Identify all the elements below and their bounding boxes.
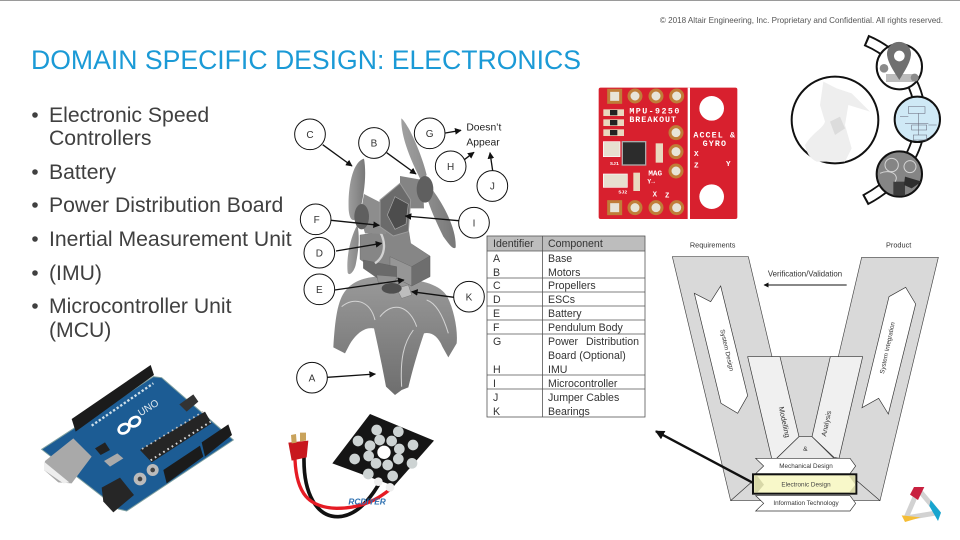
silkscreen labels: MAG <box>648 170 663 178</box>
silkscreen labels: Z <box>694 162 699 170</box>
robot exploded view diagram <box>295 118 508 395</box>
callout arrows <box>323 130 493 377</box>
does not appear note: Doesn’t <box>466 123 501 134</box>
base highlights <box>342 300 448 387</box>
callout letters: B <box>371 139 378 150</box>
callout letters: F <box>314 215 320 226</box>
Arduino logo <box>117 415 142 435</box>
component table: Power <box>548 336 578 348</box>
large robot circle <box>792 77 878 163</box>
component table: H <box>493 364 501 376</box>
UNO label: UNO <box>136 398 161 419</box>
Arduino Uno photo <box>42 365 233 512</box>
bullet list: (IMU) <box>49 262 102 285</box>
T connector <box>288 441 308 461</box>
bullet list: Power Distribution Board <box>49 194 283 217</box>
information technology chevron <box>756 496 856 511</box>
watermark: RCDIYER <box>348 497 386 507</box>
callout letters <box>306 129 495 384</box>
robot base <box>333 276 457 395</box>
component table: I <box>493 378 496 390</box>
wires <box>295 457 390 517</box>
system integration arrow <box>862 287 916 414</box>
silkscreen labels: BREAKOUT <box>629 115 676 125</box>
small resistors <box>603 109 663 191</box>
V labels: Verification/Validation <box>768 269 842 278</box>
mechanical design chevron: Mechanical Design <box>779 463 833 470</box>
component table: A <box>493 253 501 265</box>
silkscreen labels: SJ1 <box>610 161 619 167</box>
silkscreen labels: Z <box>665 192 670 200</box>
information technology chevron: Information Technology <box>773 500 839 507</box>
curved ESC strap <box>375 232 384 263</box>
callout letters: I <box>473 218 475 229</box>
silkscreen labels: ACCEL & <box>693 130 735 140</box>
component table: Propellers <box>548 280 596 292</box>
barrel jack <box>102 478 134 512</box>
silkscreen labels: Y→ <box>647 178 655 185</box>
component table: D <box>493 294 501 306</box>
component table: K <box>493 406 500 418</box>
callout letters: G <box>426 129 434 140</box>
bullet list: Inertial Measurement Unit <box>49 228 292 251</box>
copyright notice: © 2018 Altair Engineering, Inc. Proprietary and Confidential. All rights reserved. <box>660 16 943 25</box>
analysis panel <box>812 357 863 458</box>
does not appear note <box>466 123 501 148</box>
system design arrow: System Design <box>718 329 735 372</box>
silkscreen labels: SJ2 <box>618 189 627 195</box>
silkscreen labels <box>610 106 735 200</box>
solder pads <box>609 90 683 214</box>
V labels <box>690 240 911 278</box>
does not appear note: Appear <box>466 137 500 148</box>
location pin circle <box>877 44 922 89</box>
electronic design chevron highlighted <box>753 474 856 494</box>
V labels: Product <box>886 240 911 249</box>
callout letters: J <box>490 182 495 193</box>
callout circles <box>295 118 508 393</box>
Altair logo <box>902 487 941 522</box>
ampersand trapezoid: & <box>803 446 808 453</box>
ICSP pins <box>179 394 198 412</box>
bullet list: Microcontroller Unit <box>49 295 232 318</box>
system integration arrow: System Integration <box>879 321 897 375</box>
right propeller <box>401 118 456 248</box>
title: DOMAIN SPECIFIC DESIGN: ELECTRONICS <box>31 45 581 75</box>
bullet list: Electronic Speed <box>49 104 209 127</box>
callout letters: A <box>309 373 316 384</box>
component table: Microcontroller <box>548 378 618 390</box>
modelling panel: Modelling <box>777 406 792 438</box>
capacitors <box>134 473 146 485</box>
silkscreen labels: X <box>694 151 699 159</box>
microcontroller chip <box>140 412 212 462</box>
V labels: Requirements <box>690 240 736 249</box>
solder pads <box>349 425 418 492</box>
power distribution board photo <box>288 414 434 517</box>
component table: E <box>493 308 500 320</box>
corner lines <box>731 480 880 501</box>
callout letters: D <box>316 248 323 259</box>
silver USB port <box>44 438 92 483</box>
silkscreen labels: Y <box>726 161 731 169</box>
battery and body blocks <box>360 228 430 298</box>
mechanical photo circle <box>877 151 922 197</box>
verification arrow <box>764 283 847 286</box>
callout letters: H <box>447 162 454 173</box>
silkscreen labels: X <box>653 192 658 200</box>
left propeller <box>347 159 365 274</box>
component table: ESCs <box>548 294 575 306</box>
component table: Pendulum Body <box>548 322 623 334</box>
component table: G <box>493 336 501 348</box>
component table: Distribution <box>586 336 639 348</box>
component table: Component <box>548 238 603 250</box>
component table: F <box>493 322 500 334</box>
centre hole <box>377 446 391 459</box>
black board <box>332 414 434 486</box>
callout letters: E <box>316 285 323 296</box>
red circuit board <box>599 88 737 219</box>
chip pins <box>151 422 211 460</box>
hexagon plate <box>380 183 411 236</box>
component table: B <box>493 267 500 279</box>
component table: Base <box>548 253 572 265</box>
ampersand trapezoid <box>777 437 834 458</box>
blue schematic circle <box>895 97 940 142</box>
component table: Identifier <box>493 238 534 250</box>
pointer arrow to electronics <box>656 431 753 483</box>
bullet list: (MCU) <box>49 319 111 342</box>
component table: Battery <box>548 308 582 320</box>
gray V shape <box>672 257 938 501</box>
table header <box>487 236 645 251</box>
system design arrow <box>694 286 748 413</box>
analysis panel: Analysis <box>821 410 833 437</box>
component table: C <box>493 280 501 292</box>
component table: J <box>493 392 498 404</box>
connecting arc band <box>865 40 920 200</box>
crystal and small chip <box>104 453 123 467</box>
blue board <box>42 377 233 511</box>
navigation thumbnail graphic <box>792 40 940 200</box>
mechanical design chevron <box>756 458 856 474</box>
motor mounts <box>400 176 424 208</box>
solder jumpers <box>603 142 620 157</box>
modelling panel <box>748 357 799 458</box>
bullet list: Battery <box>49 161 117 184</box>
mounting holes <box>699 96 724 121</box>
silkscreen labels: GYRO <box>703 139 726 149</box>
white silk labels near header <box>92 383 153 426</box>
electronic design chevron highlighted: Electronic Design <box>781 482 831 489</box>
component table: Motors <box>548 267 580 279</box>
chip <box>622 142 646 165</box>
component table <box>487 236 645 418</box>
callout letters: C <box>306 130 314 141</box>
pin headers <box>72 365 232 483</box>
callout letters: K <box>466 292 473 303</box>
component table: Jumper Cables <box>548 392 619 404</box>
bullet list <box>32 104 292 342</box>
V-model diagram <box>656 240 941 522</box>
IMU breakout board photo <box>599 88 737 219</box>
bullet list: Controllers <box>49 127 151 150</box>
component table: Bearings <box>548 406 590 418</box>
silkscreen labels: MPU-9250 <box>629 106 679 116</box>
component table: Board (Optional) <box>548 350 626 362</box>
component table: IMU <box>548 364 567 376</box>
